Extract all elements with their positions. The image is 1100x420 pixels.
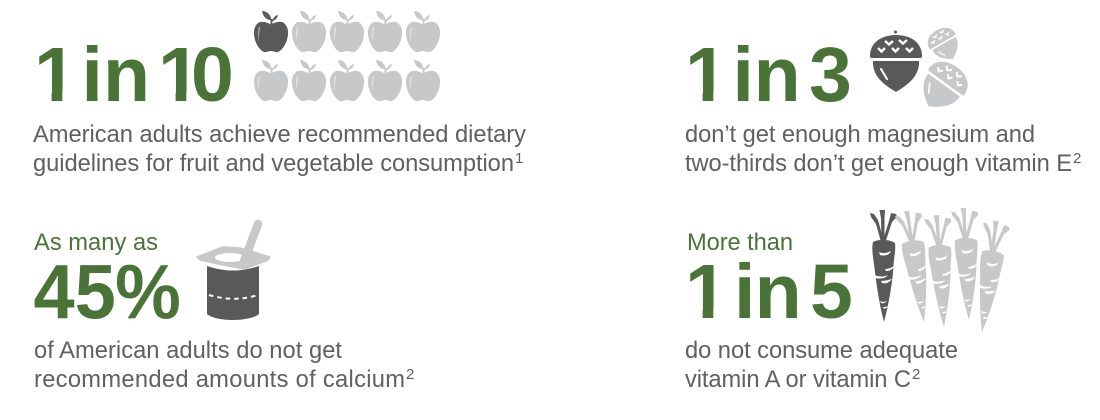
description: calcium: 2 — [406, 366, 414, 383]
description: vitamin A and C: do not consume adequate — [685, 338, 958, 364]
icon: yogurt cup with spoon — [197, 224, 270, 320]
panel: 1 in 3 magnesium and vitamin E — [685, 23, 1081, 177]
description: fruit and vegetable: 1 — [515, 150, 523, 167]
statistic: 1 in 3: 1 in 3 — [685, 32, 852, 118]
description: calcium: of American adults do not get — [34, 338, 342, 364]
description: vitamin A and C: 2 — [912, 366, 920, 383]
icon: three acorns — [870, 23, 975, 119]
description: magnesium and vitamin E: 2 — [1073, 150, 1081, 167]
statistic: 45%: 45% — [34, 249, 181, 335]
description: calcium: recommended amounts of calcium — [34, 367, 405, 393]
description: vitamin A and C: vitamin A or vitamin C — [685, 367, 911, 393]
statistic: 1 in 10: 1 in 10 — [34, 32, 234, 118]
description: fruit and vegetable: American adults achieve recommended dietary — [33, 122, 526, 148]
lead-in: As many as: As many as — [34, 230, 158, 256]
panel: 1 in 5 vitamin A and C — [685, 208, 1010, 393]
panel: 1 in 10 fruit and vegetable — [33, 11, 526, 177]
description: magnesium and vitamin E: two-thirds don’t get enough vitamin E — [685, 151, 1072, 177]
icon: five carrots, one highlighted — [870, 208, 1010, 334]
lead-in: More than: More than — [687, 230, 793, 256]
description: fruit and vegetable: guidelines for fruit and vegetable consumption — [33, 151, 514, 177]
icon: ten apples, one highlighted — [254, 11, 440, 101]
statistic: 1 in 5: 1 in 5 — [685, 249, 853, 335]
description: magnesium and vitamin E: don’t get enough magnesium and — [685, 122, 1035, 148]
panel: 45% calcium — [34, 224, 414, 393]
